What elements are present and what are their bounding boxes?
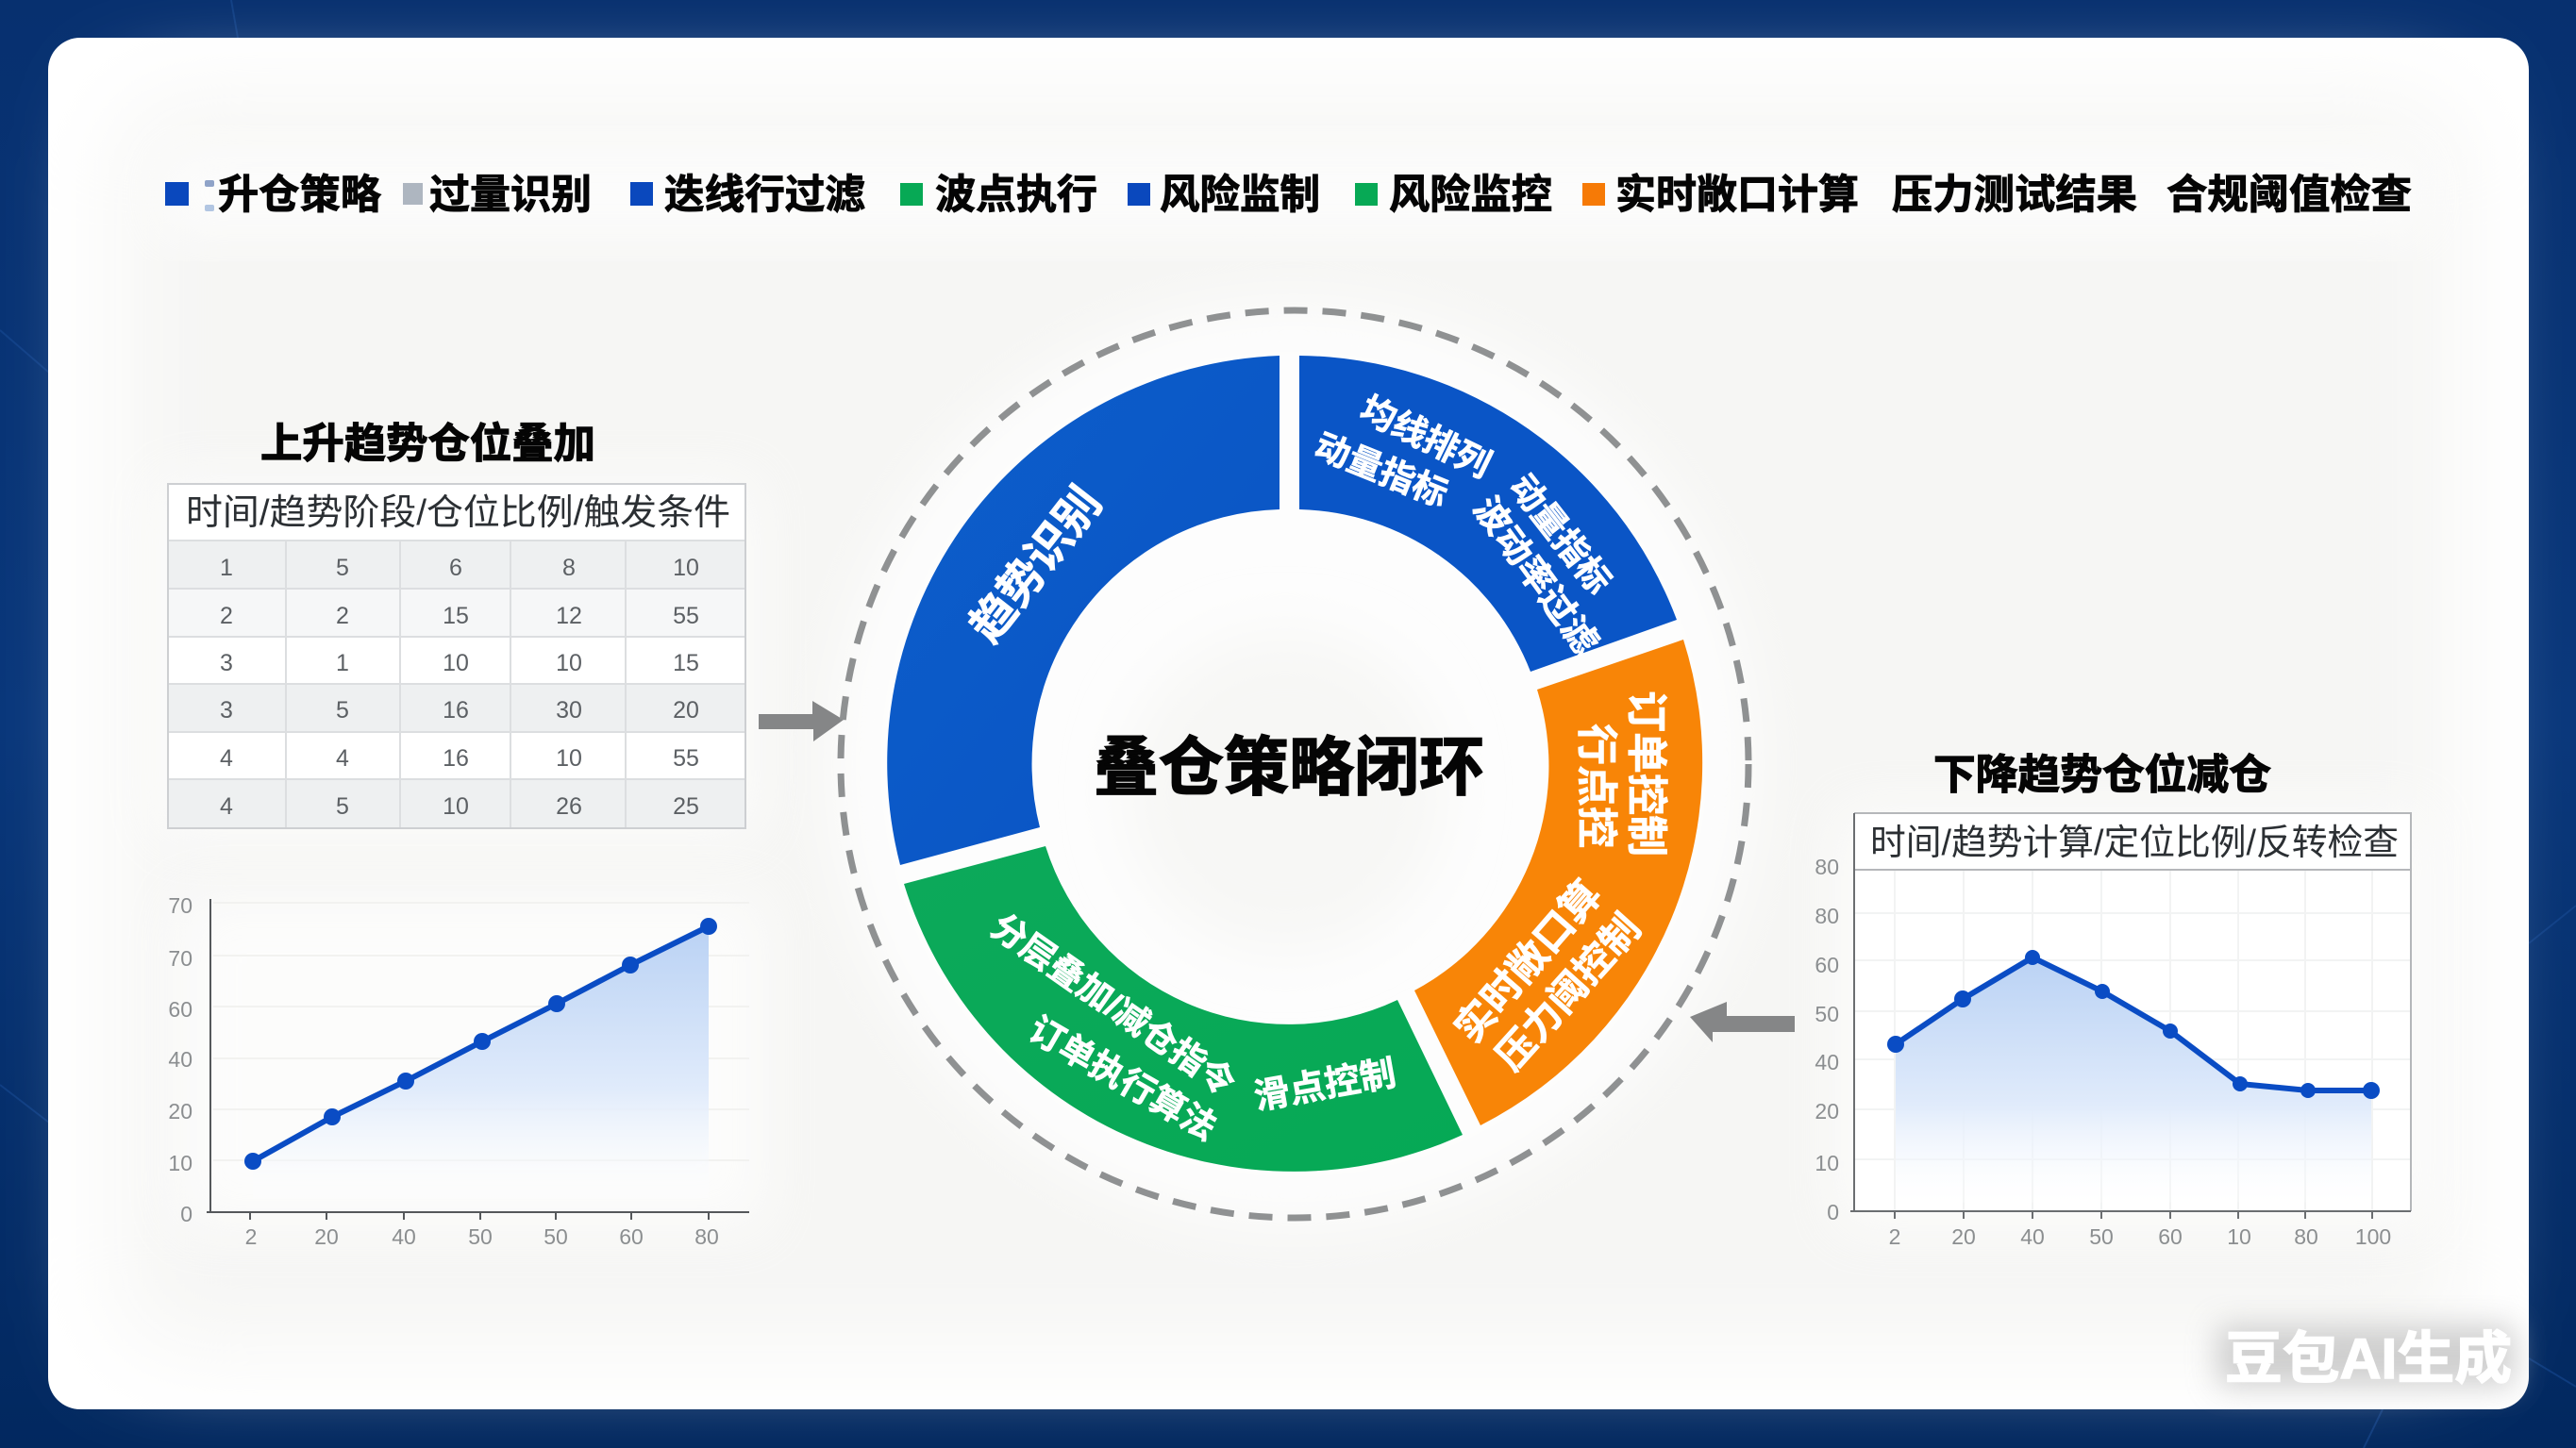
legend item: 压力测试结果: 压力测试结果	[1892, 173, 2137, 218]
line chart: falling trend with header	[1815, 813, 2411, 1249]
legend item: 波点执行: 波点执行	[935, 173, 1097, 218]
line chart: falling trend with header: 2	[1889, 1224, 1900, 1249]
legend item: 风险监制: 风险监制	[1160, 173, 1320, 218]
table: rising trend positions: 6	[449, 555, 462, 581]
table: rising trend positions: 16	[443, 697, 469, 724]
line chart: falling trend with header: 40	[2020, 1224, 2045, 1249]
segment: trend identification	[887, 356, 1280, 865]
table: rising trend positions: 20	[673, 697, 699, 724]
segment: order execution and risk: 行点控	[1573, 724, 1619, 848]
table: rising trend positions: 4	[220, 793, 233, 820]
table: rising trend positions: 5	[336, 697, 349, 724]
line chart: rising trend: 0	[180, 1202, 192, 1226]
table: rising trend positions: 2	[336, 603, 349, 629]
table: rising trend positions: 55	[673, 603, 699, 629]
left heading: 上升趋势仓位叠加	[260, 421, 595, 467]
table: rising trend positions: 26	[556, 793, 582, 820]
table: rising trend positions: 10	[556, 745, 582, 772]
line chart: rising trend: 20	[168, 1099, 192, 1123]
line chart: falling trend with header: 50	[1815, 1002, 1839, 1026]
segment: order execution and risk: 实时敞口算	[1447, 873, 1610, 1051]
line chart: rising trend: 2	[245, 1224, 257, 1249]
line chart: falling trend with header: 80	[1815, 904, 1839, 928]
line chart: falling trend with header: 60	[1815, 953, 1839, 977]
segment: layered execution: 滑点控制	[1251, 1054, 1399, 1118]
line chart: rising trend: 20	[314, 1224, 339, 1249]
segment: filters: 波动率过滤	[1465, 490, 1606, 662]
line chart: falling trend with header: 0	[1827, 1200, 1839, 1224]
segment: layered execution: 订单执行算法	[1022, 1009, 1223, 1148]
line chart: falling trend with header: 50	[2089, 1224, 2114, 1249]
segment: filters	[1299, 356, 1677, 672]
table: rising trend positions: 30	[556, 697, 582, 724]
table: rising trend positions: 10	[556, 650, 582, 676]
line chart: rising trend: 10	[168, 1151, 192, 1175]
line chart: rising trend: 70	[168, 946, 192, 971]
table: rising trend positions: 15	[443, 603, 469, 629]
line chart: falling trend with header: 80	[2294, 1224, 2318, 1249]
ring centre title: 叠仓策略闭环	[1094, 732, 1484, 804]
segment: order execution and risk: 压力阈控制	[1487, 906, 1649, 1079]
legend item: 风险监控: 风险监控	[1389, 173, 1552, 218]
table: rising trend positions: 4	[220, 745, 233, 772]
segment: layered execution	[904, 846, 1463, 1172]
legend item: 合规阈值检查: 合规阈值检查	[2166, 173, 2412, 218]
segment: layered execution: 分层叠加/减仓指令	[984, 907, 1242, 1104]
table: rising trend positions: 10	[673, 555, 699, 581]
table: rising trend positions: 5	[336, 555, 349, 581]
line chart: falling trend with header: 时间/趋势计算/定位比例/反转检查	[1870, 824, 2399, 863]
legend row	[165, 173, 2412, 218]
right heading: 下降趋势仓位减仓	[1933, 752, 2271, 798]
watermark: 豆包AI生成	[2225, 1327, 2512, 1390]
line chart: falling trend with header: 20	[1951, 1224, 1976, 1249]
legend item: 升仓策略: 升仓策略	[218, 173, 381, 218]
legend item: 实时敞口计算: 实时敞口计算	[1615, 173, 1859, 218]
line chart: rising trend	[168, 893, 749, 1249]
segment: filters: 均线排列	[1354, 390, 1497, 485]
line chart: falling trend with header: 100	[2355, 1224, 2391, 1249]
segment: filters: 动量指标	[1310, 426, 1453, 514]
table: rising trend positions: 1	[336, 650, 349, 676]
line chart: falling trend with header: 60	[2158, 1224, 2183, 1249]
line chart: falling trend with header: 10	[1815, 1151, 1839, 1175]
line chart: rising trend: 80	[694, 1224, 719, 1249]
line chart: rising trend: 40	[392, 1224, 416, 1249]
table: rising trend positions	[168, 484, 745, 828]
line chart: rising trend: 60	[619, 1224, 644, 1249]
line chart: falling trend with header: 20	[1815, 1099, 1839, 1123]
dashed outer ring	[841, 310, 1748, 1218]
arrow: right chart into ring	[1690, 1002, 1795, 1042]
segment: order execution and risk: 订单控制	[1623, 691, 1669, 857]
legend item: 迭线行过滤: 迭线行过滤	[664, 173, 865, 218]
table: rising trend positions: 5	[336, 793, 349, 820]
line chart: rising trend: 60	[168, 997, 192, 1022]
ring diagram	[887, 356, 1702, 1172]
line chart: rising trend: 70	[168, 893, 192, 918]
table: rising trend positions: 10	[443, 793, 469, 820]
segment: order execution and risk	[1414, 640, 1702, 1125]
table: rising trend positions: 16	[443, 745, 469, 772]
line chart: falling trend with header: 10	[2227, 1224, 2251, 1249]
line chart: falling trend with header: 40	[1815, 1050, 1839, 1074]
line chart: rising trend: 40	[168, 1047, 192, 1072]
table: rising trend positions: 8	[562, 555, 576, 581]
segment: filters: 动量指标	[1502, 467, 1618, 601]
arrow: left chart into ring	[759, 701, 844, 741]
table: rising trend positions: 12	[556, 603, 582, 629]
table: rising trend positions: 2	[220, 603, 233, 629]
table: rising trend positions: 时间/趋势阶段/仓位比例/触发条件	[186, 493, 730, 533]
table: rising trend positions: 25	[673, 793, 699, 820]
table: rising trend positions: 3	[220, 650, 233, 676]
line chart: rising trend: 50	[468, 1224, 493, 1249]
line chart: falling trend with header: 80	[1815, 855, 1839, 879]
table: rising trend positions: 1	[220, 555, 233, 581]
table: rising trend positions: 3	[220, 697, 233, 724]
table: rising trend positions: 15	[673, 650, 699, 676]
table: rising trend positions: 10	[443, 650, 469, 676]
table: rising trend positions: 4	[336, 745, 349, 772]
table: rising trend positions: 55	[673, 745, 699, 772]
legend item: 过量识别: 过量识别	[429, 173, 592, 218]
segment: trend identification: 趋势识别	[961, 478, 1112, 652]
line chart: rising trend: 50	[544, 1224, 568, 1249]
